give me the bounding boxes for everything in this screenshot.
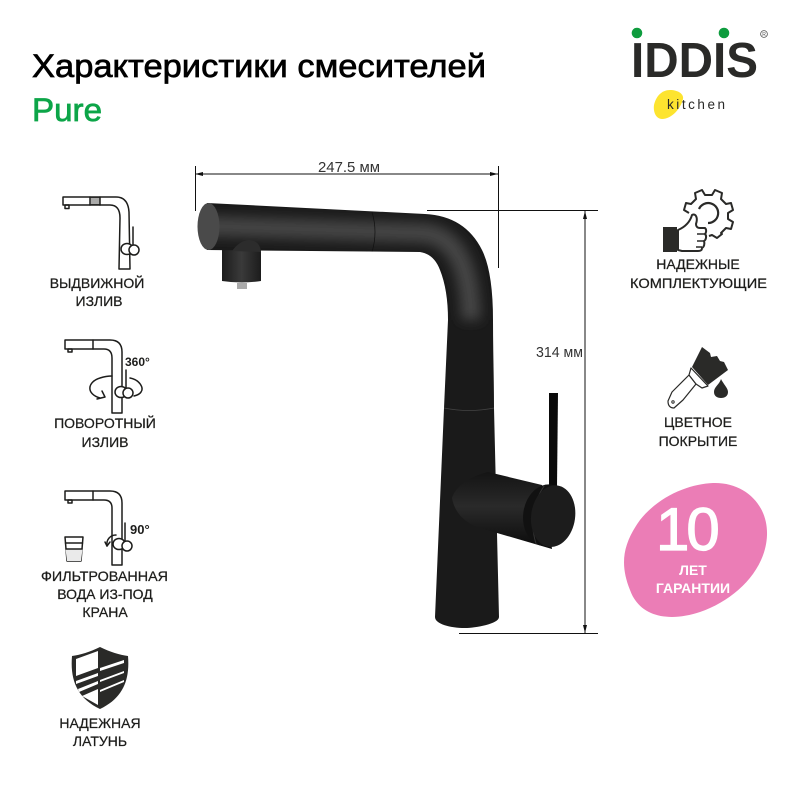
label: color coating: ЦВЕТНОЕ — [664, 414, 732, 430]
label: reliable brass: ЛАТУНЬ — [73, 733, 127, 749]
label: filtered water: ВОДА ИЗ-ПОД — [57, 586, 153, 602]
dimension: height — [427, 210, 598, 634]
icon: 90 degree filter lever — [65, 491, 132, 565]
label: 90 degrees: 90° — [130, 522, 150, 537]
aerator — [222, 245, 261, 282]
logo: IDDIS kitchen: IDDIS — [631, 34, 758, 88]
label: filtered water: КРАНА — [82, 604, 128, 620]
icon: paint brush with drop — [668, 347, 728, 408]
icon: 360 degree swivel spout — [65, 340, 142, 413]
spout and body — [207, 203, 499, 628]
label: color coating: ПОКРЫТИЕ — [659, 433, 737, 449]
lever — [549, 393, 558, 487]
warranty badge: ГАРАНТИИ — [656, 580, 730, 596]
handle body — [452, 472, 552, 549]
title: Характеристики смесителей — [32, 48, 486, 84]
label: reliable brass: НАДЕЖНАЯ — [59, 715, 141, 731]
label: swivel spout: ПОВОРОТНЫЙ — [54, 414, 156, 431]
label: filtered water: ФИЛЬТРОВАННАЯ — [41, 568, 168, 584]
label: 360 degrees: 360° — [125, 355, 150, 369]
warranty badge: ЛЕТ — [679, 562, 707, 578]
label: pull-out spout: ИЗЛИВ — [76, 293, 122, 309]
dimension: height: 314 мм — [536, 345, 583, 361]
label: reliable components: КОМПЛЕКТУЮЩИЕ — [630, 275, 767, 291]
subtitle: series name: Pure — [32, 92, 102, 128]
label: swivel spout: ИЗЛИВ — [82, 434, 128, 450]
label: reliable components: НАДЕЖНЫЕ — [656, 256, 740, 272]
icon: pull-out spout faucet — [63, 197, 139, 269]
faucet — [190, 195, 579, 640]
logo: IDDIS kitchen: R — [762, 32, 766, 38]
warranty badge: 10 — [656, 496, 718, 563]
logo: IDDIS kitchen — [631, 28, 767, 119]
dimension: width — [195, 159, 498, 268]
warranty badge — [624, 483, 767, 617]
icon: gear with thumb up — [663, 190, 733, 252]
dimension: width: 247.5 мм — [318, 159, 380, 176]
icon: brass shield — [72, 647, 128, 709]
aerator dome — [232, 240, 261, 252]
icon: glass of water — [65, 537, 83, 561]
handle disc — [519, 481, 579, 550]
label: pull-out spout: ВЫДВИЖНОЙ — [50, 274, 144, 291]
logo: IDDIS kitchen: kitchen — [667, 97, 725, 112]
spout end cap — [198, 203, 220, 250]
